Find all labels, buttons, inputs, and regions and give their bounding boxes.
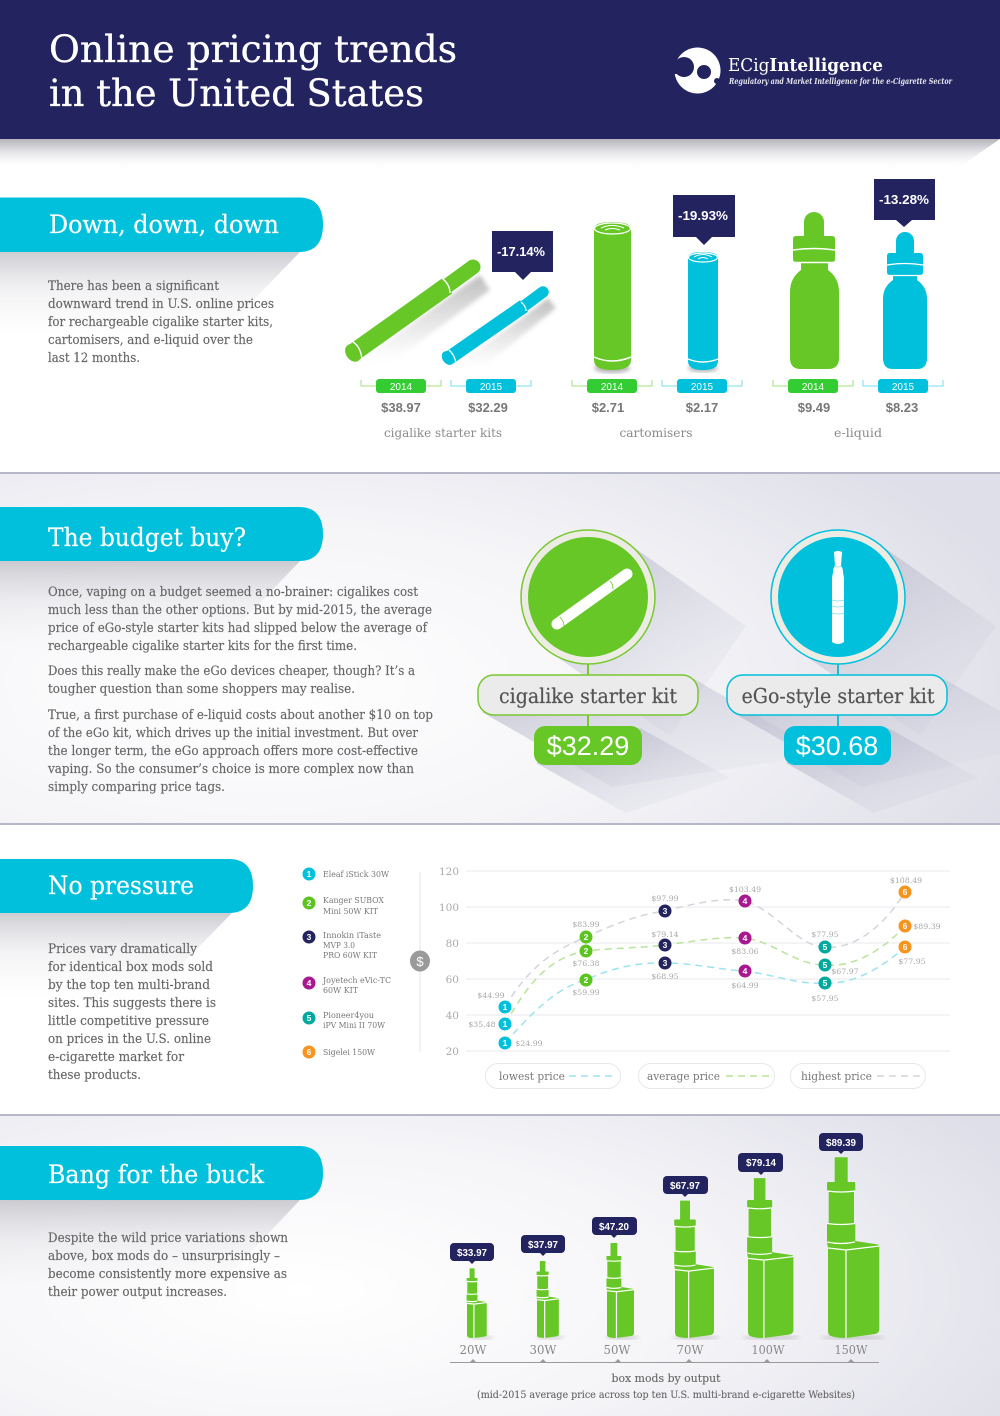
- icon: blue cigalike 2015: [439, 292, 556, 367]
- product legend: Eleaf iStick 30W: [323, 869, 390, 879]
- data markers: 2: [584, 975, 589, 985]
- callout: -17.14%: -17.14%: [497, 244, 545, 259]
- heading pill: [0, 1146, 323, 1200]
- data markers: 1: [503, 1002, 508, 1012]
- heading pill: [0, 198, 323, 252]
- body text: Once, vaping on a budget seemed a no-brainer: cigalikes cost: [48, 584, 418, 599]
- header banner: [0, 0, 1000, 139]
- product legend: PRO 60W KIT: [323, 950, 377, 960]
- green kit: cigalike starter kit: [478, 530, 698, 765]
- y axis labels: [439, 866, 459, 1058]
- body text: above, box mods do – unsurprisingly –: [48, 1248, 280, 1263]
- kit price: $30.68: [796, 731, 878, 761]
- year badges: 2014: [390, 382, 413, 393]
- product legend: 1: [307, 869, 312, 879]
- wattage axis: 70W: [676, 1343, 704, 1357]
- icon: green cigalike 2014: [342, 267, 490, 365]
- wattage axis: 150W: [834, 1343, 868, 1357]
- product legend: 2: [307, 898, 312, 908]
- body text: much less than the other options. But by mid-2015, the average: [48, 602, 432, 617]
- kit price: [784, 726, 891, 765]
- chart legend: average price: [647, 1070, 720, 1083]
- data markers: 3: [663, 906, 668, 916]
- data markers: 4: [743, 966, 748, 976]
- data value labels: $97.99: [651, 894, 679, 903]
- wattage axis: [450, 1343, 879, 1362]
- kit price: $32.29: [547, 731, 629, 761]
- prices: [381, 400, 918, 415]
- section background: the budget buy: [0, 472, 1000, 824]
- body text: [48, 1230, 288, 1299]
- data markers: 1: [503, 1038, 508, 1048]
- year badges: 2015: [480, 382, 503, 393]
- panel: the budget buy: [0, 507, 1000, 813]
- kit name: eGo-style starter kit: [742, 684, 935, 708]
- heading shadow: [0, 913, 232, 1000]
- y axis labels: 80: [446, 938, 459, 950]
- prices: $8.23: [886, 400, 918, 415]
- product legend: MVP 3.0: [323, 940, 355, 950]
- icon: blue bottle 2015: [883, 232, 927, 369]
- dashed price lines: [505, 892, 905, 1043]
- body text: [48, 941, 216, 1082]
- data markers: 2: [584, 932, 589, 942]
- category labels: cartomisers: [620, 426, 692, 440]
- data markers: 5: [823, 978, 828, 988]
- wattage axis: 50W: [604, 1343, 631, 1357]
- price tag: $67.97: [663, 1176, 708, 1197]
- product legend: iPV Mini II 70W: [323, 1020, 386, 1030]
- price tag: $33.97: $33.97: [457, 1248, 487, 1259]
- data markers: 6: [903, 942, 908, 952]
- y axis labels: 60: [446, 974, 459, 986]
- heading pill: The budget buy?: [48, 523, 246, 552]
- body text: rechargeable cigalike starter kits for the first time.: [48, 638, 357, 653]
- year badges: 2015: [892, 382, 915, 393]
- logo: ECigIntelligence: ECigIntelligence: [728, 55, 883, 76]
- heading shadow: [0, 252, 300, 340]
- prices: $2.71: [592, 400, 624, 415]
- year badges: 2014: [601, 382, 624, 393]
- heading pill: No pressure: [48, 871, 194, 900]
- price tag: $47.20: $47.20: [599, 1222, 629, 1233]
- body text: Prices vary dramatically: [48, 941, 198, 956]
- product legend: Innokin iTaste: [323, 930, 381, 940]
- intro text: for rechargeable cigalike starter kits,: [48, 314, 273, 329]
- panel: bang for the buck: [0, 1133, 885, 1401]
- heading shadow: [0, 561, 300, 650]
- data markers: 6: [903, 921, 908, 931]
- data markers: 3: [663, 958, 668, 968]
- data value labels: $44.99: [477, 991, 505, 1000]
- icon: dollar axis badge: $: [416, 954, 424, 969]
- section background: bang for the buck: [0, 1114, 1000, 1416]
- data markers: 6: [903, 887, 908, 897]
- body text: the longer term, the eGo approach offers more cost-effective: [48, 743, 418, 758]
- intro text: There has been a significant: [48, 278, 219, 293]
- header shadow: [0, 139, 1000, 170]
- category labels: cigalike starter kits: [384, 426, 502, 440]
- icon: eGo badge: [771, 530, 905, 664]
- kit name: [478, 675, 698, 715]
- product legend: Kanger SUBOX: [323, 895, 384, 905]
- chart legend: [486, 1064, 926, 1088]
- title: in the United States: [49, 72, 424, 115]
- icon: box mod 150W: [821, 1157, 885, 1340]
- callout: -19.93%: [673, 195, 735, 245]
- body text: Despite the wild price variations shown: [48, 1230, 288, 1245]
- data value labels: $59.99: [572, 988, 600, 997]
- prices: $38.97: [381, 400, 421, 415]
- data markers: [498, 886, 912, 1050]
- panel: no pressure: [0, 859, 950, 1088]
- data value labels: $64.99: [731, 981, 759, 990]
- intro text: last 12 months.: [48, 350, 140, 365]
- data markers: 1: [503, 1019, 508, 1029]
- icon: box mod 100W: [742, 1178, 800, 1340]
- category labels: e-liquid: [834, 426, 882, 440]
- panel: down, down, down: [0, 179, 943, 440]
- year bracket labels: [361, 380, 943, 386]
- product legend: Mini 50W KIT: [323, 906, 379, 916]
- body text: e-cigarette market for: [48, 1049, 185, 1064]
- data value labels: $77.95: [898, 957, 926, 966]
- long shadows: [482, 542, 1000, 813]
- wattage axis: 100W: [752, 1343, 785, 1357]
- product legend: 4: [307, 978, 312, 988]
- data markers: 5: [823, 960, 828, 970]
- heading pill: Bang for the buck: [48, 1160, 265, 1189]
- body text: [47, 584, 433, 794]
- chart caption: (mid-2015 average price across top ten U.S. multi-brand e-cigarette Websites): [477, 1389, 855, 1401]
- price tag: $47.20: [592, 1217, 637, 1238]
- data value labels: [468, 876, 941, 1048]
- price tag: $33.97: [450, 1243, 494, 1264]
- icon: dollar axis badge: [410, 950, 430, 972]
- wattage axis: 30W: [530, 1343, 557, 1357]
- icon: box mod 50W: [605, 1243, 639, 1340]
- price tag: $37.97: $37.97: [528, 1240, 558, 1251]
- data value labels: $76.38: [572, 959, 600, 968]
- prices: $2.17: [686, 400, 718, 415]
- data markers: 5: [823, 942, 828, 952]
- kit name: [727, 675, 947, 715]
- body text: tougher question than some shoppers may realise.: [48, 681, 355, 696]
- data value labels: $35.48: [468, 1020, 496, 1029]
- intro text: [48, 278, 274, 365]
- price tag: $67.97: $67.97: [670, 1181, 700, 1192]
- data value labels: $24.99: [515, 1039, 543, 1048]
- body text: on prices in the U.S. online: [48, 1031, 211, 1046]
- chart caption: [477, 1371, 855, 1401]
- year badges: 2014: [802, 382, 825, 393]
- year badges: 2015: [691, 382, 714, 393]
- blue kit: eGo-style starter kit: [727, 530, 947, 765]
- y axis labels: 100: [439, 902, 459, 914]
- body text: these products.: [48, 1067, 141, 1082]
- callout: -13.28%: -13.28%: [879, 192, 929, 207]
- data value labels: $77.95: [811, 930, 839, 939]
- callout: -17.14%: [492, 231, 553, 280]
- product legend: Pioneer4you: [323, 1010, 374, 1020]
- body text: become consistently more expensive as: [48, 1266, 287, 1281]
- data markers: 4: [743, 896, 748, 906]
- data markers: 3: [663, 940, 668, 950]
- body text: simply comparing price tags.: [48, 779, 225, 794]
- data value labels: $103.49: [729, 885, 761, 894]
- y axis labels: 120: [439, 866, 459, 878]
- intro text: downward trend in U.S. online prices: [48, 296, 274, 311]
- body text: Does this really make the eGo devices cheaper, though? It’s a: [48, 663, 415, 678]
- price tag: $89.39: $89.39: [826, 1138, 856, 1149]
- product legend: Sigelei 150W: [323, 1047, 376, 1057]
- intro text: cartomisers, and e-liquid over the: [48, 332, 253, 347]
- body text: vaping. So the consumer’s choice is more complex now than: [47, 761, 414, 776]
- data value labels: $108.49: [890, 876, 922, 885]
- data value labels: $67.97: [831, 967, 859, 976]
- heading pill: [0, 507, 323, 561]
- product legend: Joyetech eVic-TC: [322, 975, 391, 985]
- prices: $32.29: [468, 400, 508, 415]
- data markers: 2: [584, 946, 589, 956]
- wattage axis: 20W: [460, 1343, 487, 1357]
- prices: $9.49: [798, 400, 830, 415]
- product legend: [302, 868, 391, 1058]
- data value labels: $89.39: [913, 922, 941, 931]
- body text: True, a first purchase of e-liquid costs about another $10 on top: [48, 707, 433, 722]
- icon: cigalike badge: [521, 530, 655, 664]
- line chart: price by product: [439, 866, 950, 1058]
- kit name: cigalike starter kit: [499, 684, 678, 708]
- chart legend: lowest price: [499, 1070, 565, 1083]
- y axis labels: 40: [446, 1010, 459, 1022]
- callout: -13.28%: [874, 179, 935, 227]
- product legend: 6: [307, 1047, 312, 1057]
- icon: green cartomiser 2014: [594, 222, 631, 373]
- data value labels: $83.99: [572, 920, 600, 929]
- icon: box mod 30W: [536, 1261, 564, 1339]
- section background: down, down, down: [0, 139, 1000, 472]
- chart caption: box mods by output: [612, 1371, 721, 1385]
- product legend: 3: [307, 932, 312, 942]
- data value labels: $83.06: [731, 947, 759, 956]
- data markers: 4: [743, 933, 748, 943]
- heading shadow: [0, 1200, 300, 1290]
- callout: -19.93%: -19.93%: [678, 208, 728, 223]
- title: [49, 28, 457, 115]
- body text: little competitive pressure: [48, 1013, 209, 1028]
- icon: blue cartomiser 2015: [688, 252, 718, 372]
- icon: green bottle 2014: [790, 212, 839, 369]
- body text: by the top ten multi-brand: [48, 977, 210, 992]
- section background: no pressure: [0, 824, 1000, 1114]
- logo: ECigIntelligence: Regulatory and Market Intelligence for the e-Cigarette Sector: [728, 76, 953, 86]
- price tag: $89.39: [819, 1133, 863, 1154]
- kit price: [534, 726, 642, 765]
- title: Online pricing trends: [49, 28, 457, 71]
- heading pill: [0, 859, 253, 913]
- body text: sites. This suggests there is: [48, 995, 216, 1010]
- product legend: 60W KIT: [323, 985, 359, 995]
- icon: box mod 20W: [467, 1268, 493, 1339]
- price tag: $79.14: [738, 1153, 783, 1175]
- category labels: [384, 426, 882, 440]
- price tag: $79.14: $79.14: [746, 1158, 776, 1169]
- data value labels: $57.95: [811, 994, 839, 1003]
- heading pill: Down, down, down: [49, 210, 279, 239]
- data value labels: $68.95: [651, 972, 679, 981]
- data value labels: $79.14: [651, 930, 679, 939]
- body text: for identical box mods sold: [48, 959, 213, 974]
- chart legend: highest price: [801, 1070, 872, 1083]
- price tag: $37.97: [521, 1235, 565, 1256]
- body text: price of eGo-style starter kits had slipped below the average of: [48, 620, 428, 635]
- icon: box mod 70W: [672, 1201, 720, 1340]
- product legend: 5: [307, 1013, 312, 1023]
- logo: ECigIntelligence: [670, 48, 953, 94]
- body text: their power output increases.: [48, 1284, 227, 1299]
- year badges: [376, 379, 928, 393]
- body text: of the eGo kit, which drives up the initial investment. But over: [48, 725, 419, 740]
- y axis labels: 20: [446, 1046, 459, 1058]
